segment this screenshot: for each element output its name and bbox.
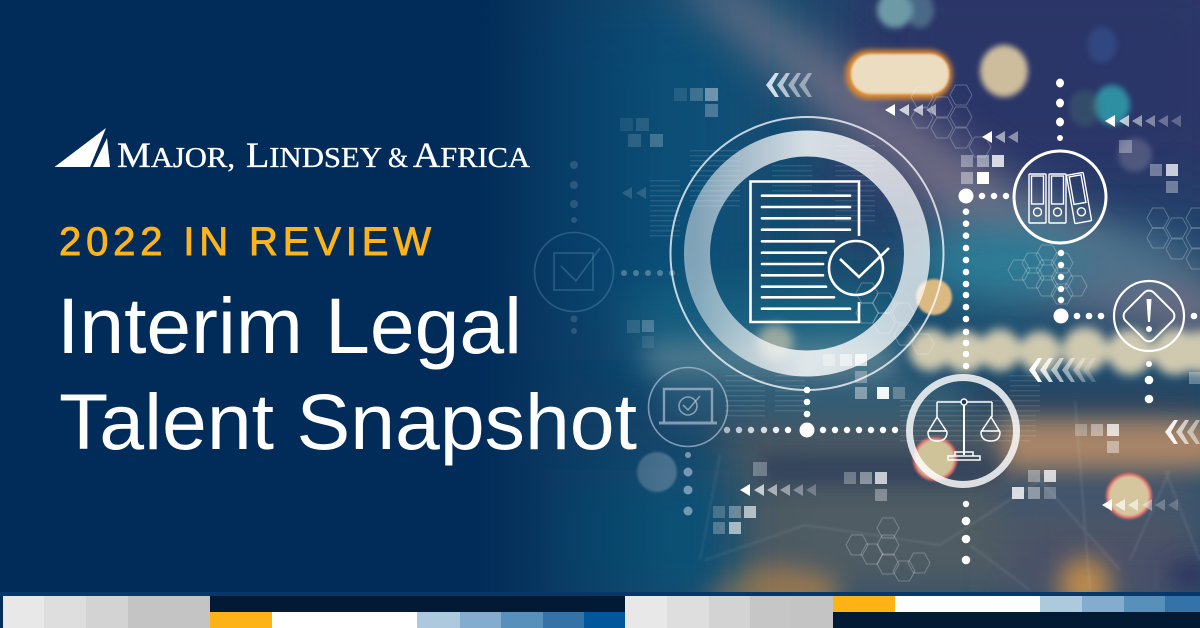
faint checkbox circle icon [534,232,614,312]
chevrons: top [766,73,812,97]
logo wordmark: LINDSEY [246,135,382,175]
chevrons: middle right [1029,358,1096,382]
logo wordmark: & [388,142,408,174]
logo wordmark: AFRICA [413,135,530,175]
dots: below alert [1145,361,1153,403]
strip: right colours [833,596,1200,612]
logo mark: sail triangles [54,128,110,167]
triangles: lower center [740,484,816,496]
main ring with document icon [670,117,944,390]
scalloped cream light band [757,324,1200,375]
dots: binders to alert [1054,250,1197,324]
dots: left vertical line with hub [958,188,1009,369]
logo wordmark [117,135,530,175]
dotted connector lines [570,78,1197,564]
decorative tech overlays: faint squares [620,88,1200,534]
title: Interim Legal [57,281,522,370]
triangles: near binders [982,131,1018,143]
dots: above binders [1056,78,1064,141]
chevrons: right edge [1165,420,1200,444]
dots: left faint [570,161,675,334]
arrows [622,73,1200,511]
scales of justice circle icon [910,378,1016,484]
strip: dark blocks [210,596,1200,628]
triangles: left faint [622,187,646,199]
pixel squares: left faint [627,320,654,348]
strip: left colours [210,612,625,628]
alert circle icon [1114,281,1184,351]
icon: document with check [750,182,889,322]
thin outer circle [670,117,944,390]
binders circle icon [1014,151,1106,243]
triangles: lower right [1102,499,1178,511]
eyebrow: 2022 in review: 2022 IN REVIEW [59,220,431,264]
dots: below scales [962,501,970,564]
pixel squares: upper right cluster [961,140,1178,193]
decorative line textures [650,145,1040,445]
pixel squares: below main ring [823,354,905,399]
strip: left greys [3,596,210,628]
logo: Major, Lindsey & Africa [54,128,530,175]
dots: below laptop (faint) [684,452,692,516]
title [57,281,637,466]
thick ring [697,144,917,364]
strip: right greys [625,596,833,628]
pixel squares: lower right [1012,372,1200,499]
faint laptop circle icon [648,368,728,446]
triangles: upper right [1105,115,1181,127]
decorative hexagon clusters [846,85,1200,581]
title: Talent Snapshot [59,377,637,466]
pixel squares: top center [620,88,718,147]
pixel squares: lower center [713,462,887,534]
bottom colour strip [0,592,1200,628]
background photo: blurred city lights [470,0,1200,618]
triangles: upper middle [885,104,936,116]
logo wordmark: MAJOR, [117,135,235,175]
dots: lower horizontal line [724,387,898,438]
left navy panel with fade into photo [0,0,830,592]
